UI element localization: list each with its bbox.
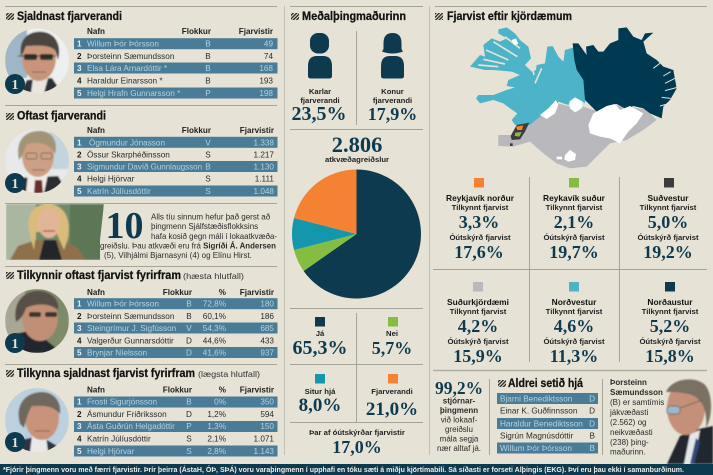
table: tilkynna sjaldnast: 1.143 (254, 447, 274, 456)
table: tilkynnir oftast: % (219, 288, 226, 297)
table: sjaldnast fjarverandi: 49 (264, 40, 273, 49)
district: Reykjavík norður: 17,6% (454, 242, 504, 262)
panel: aldrei setið hjá (497, 378, 598, 454)
district: Reykjavík suður: 2,1% (554, 212, 594, 232)
table: tilkynnir oftast: 937 (260, 348, 274, 358)
icon: kona (381, 33, 404, 78)
list: aldrei setið hjá: Willum Þór Þórsson (500, 444, 572, 453)
heading: Tilkynna sjaldnast fjarvist fyrirfram: (lægsta hlutfall) (198, 369, 260, 379)
heading: Tilkynna sjaldnast fjarvist fyrirfram: Tilkynna sjaldnast fjarvist fyrirfram (17, 368, 195, 380)
panel: tilkynnir oftast fjarvist fyrirfram (5, 270, 278, 358)
text block: Þorsteinn Sæmundsson: (B) er samtímis (610, 398, 664, 407)
table: tilkynnir oftast: 685 (260, 324, 274, 333)
district: Norðaustur: 5,2% (650, 316, 690, 336)
table: tilkynnir oftast: B (186, 300, 192, 309)
table: tilkynnir oftast: 54,3% (203, 324, 226, 333)
district: Reykjavík norður: Tilkynnt fjarvist (452, 203, 509, 212)
table: tilkynna sjaldnast: Ásta Guðrún Helgadóttir (87, 421, 175, 431)
callout: 99,2% stjórnarþingmenn: stjórnar- (443, 396, 476, 406)
table: tilkynnir oftast: 433 (260, 336, 274, 346)
table: sjaldnast fjarverandi: Þorsteinn Sæmundsson (87, 52, 175, 61)
list: aldrei setið hjá: B (590, 444, 596, 453)
table: tilkynna sjaldnast: 1.071 (254, 434, 274, 444)
table: tilkynnir oftast: Fjarvistir (240, 288, 275, 297)
table: tilkynnir oftast: 44,6% (203, 336, 226, 346)
district: Norðvestur: 11,3% (550, 346, 598, 366)
district: Norðaustur: Norðaustur (647, 297, 693, 307)
district: Reykjavík norður: Reykjavík norður (446, 193, 515, 203)
table: oftast fjarverandi: Össur Skarphéðinsson (87, 150, 170, 160)
text block: Þorsteinn Sæmundsson: maðurinn. (610, 448, 646, 456)
table: tilkynna sjaldnast: Flokkur (163, 386, 193, 394)
district: Suðurkjördæmi: Suðurkjördæmi (447, 297, 509, 307)
photo: Þorsteinn Sæmundsson (666, 379, 713, 464)
panel: meðalþingmaðurinn (291, 11, 421, 457)
table: sjaldnast fjarverandi: B (205, 64, 211, 73)
table: tilkynna sjaldnast (74, 386, 278, 456)
text block: atkvæði gegn máli: þingmenn Sjálfstæðisflokksins (151, 222, 258, 231)
table: tilkynnir oftast (74, 288, 278, 358)
stat: óútskýrðar fjarvistir: Þar af óútskýrðar fjarvistir (309, 428, 405, 437)
table: oftast fjarverandi: Fjarvistir (240, 126, 275, 135)
stat: konur fjarverandi (368, 87, 417, 124)
text block: Þorsteinn Sæmundsson: neikvæðasti (610, 428, 653, 437)
stat: konur fjarverandi: Konur (381, 87, 404, 96)
district: Reykjavík suður (543, 178, 606, 262)
photo: Frosti Sigurjónsson (5, 388, 69, 452)
text block: atkvæði gegn máli: (5), Vilhjálmi Bjarnasyni (4) og Elínu Hirst. (104, 251, 252, 260)
district: Suðvestur: Óútskýrð fjarvist (637, 233, 699, 242)
badge: 1 (5, 173, 25, 193)
stat: 2.806 atkvæðagreiðslur: 2.806 (332, 132, 382, 157)
stat: óútskýrðar fjarvistir: 17,0% (332, 437, 382, 457)
district: Suðurkjördæmi: Tilkynnt fjarvist (450, 307, 507, 316)
list: aldrei setið hjá: Haraldur Benediktsson (500, 420, 583, 428)
district: Norðaustur (639, 282, 701, 366)
district: Reykjavík suður: 19,7% (549, 242, 599, 262)
stat: karlar fjarverandi: fjarverandi (300, 96, 340, 105)
table: oftast fjarverandi: Sigmundur Davíð Gunnlaugsson (87, 161, 202, 171)
table: tilkynna sjaldnast: 5 (77, 447, 82, 456)
table: tilkynna sjaldnast: Katrín Júlíusdóttir (87, 434, 151, 444)
badge: 1: 1 (12, 337, 18, 352)
table: sjaldnast fjarverandi (74, 27, 278, 98)
table: tilkynnir oftast: 1 (77, 300, 82, 309)
badge: 1 (5, 432, 25, 452)
table: oftast fjarverandi: 1.217 (254, 151, 274, 160)
table: tilkynna sjaldnast: S (186, 447, 192, 456)
table: tilkynnir oftast: 5 (77, 348, 82, 358)
heading: Oftast fjarverandi: Oftast fjarverandi (17, 110, 106, 122)
stat: konur fjarverandi: fjarverandi (373, 96, 412, 105)
callout: 99,2% stjórnarþingmenn: mála segja (440, 434, 479, 444)
legend: fjarverandi: Fjarverandi (371, 387, 413, 396)
heading: Tilkynnir oftast fjarvist fyrirfram: Tilkynnir oftast fjarvist fyrirfram (17, 270, 181, 282)
list: aldrei setið hjá: D (589, 406, 595, 416)
district: Norðvestur: Óútskýrð fjarvist (543, 337, 605, 346)
table: tilkynnir oftast: Flokkur (163, 288, 193, 297)
district: Norðvestur (543, 282, 605, 366)
badge: 1: 1 (12, 78, 18, 93)
table: sjaldnast fjarverandi: 198 (259, 89, 273, 98)
district: Norðaustur: Óútskýrð fjarvist (639, 337, 701, 346)
big number 10: 10 (106, 205, 144, 247)
table: sjaldnast fjarverandi: 168 (259, 64, 273, 73)
district: Norðvestur: Tilkynnt fjarvist (546, 307, 603, 316)
table: oftast fjarverandi: 2 (77, 151, 82, 160)
table: tilkynnir oftast: B (186, 312, 192, 321)
text block: atkvæði gegn máli: hafa kosið gegn máli í lokaatkvæða- (151, 232, 277, 241)
table: tilkynnir oftast: 41,6% (203, 348, 226, 358)
table: tilkynna sjaldnast: 350 (260, 398, 274, 407)
callout: 99,2% stjórnarþingmenn: nær alltaf já. (437, 444, 481, 453)
text block: Þorsteinn Sæmundsson (609, 378, 664, 456)
table: sjaldnast fjarverandi: 193 (259, 76, 273, 86)
table: tilkynnir oftast: 186 (260, 312, 274, 321)
list: aldrei setið hjá (497, 393, 598, 454)
table: tilkynna sjaldnast: 2,8% (207, 447, 226, 456)
district: Reykjavík suður: Reykavík suður (543, 193, 606, 203)
panel: tilkynna sjaldnast fjarvist fyrirfram (5, 368, 278, 456)
table: oftast fjarverandi: 4 (77, 175, 82, 184)
table: sjaldnast fjarverandi: Elsa Lára Arnardóttir * (87, 64, 168, 73)
table: tilkynna sjaldnast: 2,1% (207, 434, 226, 444)
table: tilkynna sjaldnast: 150 (260, 422, 274, 431)
table: oftast fjarverandi: Flokkur (182, 126, 212, 135)
table: oftast fjarverandi: V (205, 138, 211, 147)
table: tilkynnir oftast: Steingrímur J. Sigfússon (87, 324, 177, 333)
table: oftast fjarverandi: 1.048 (254, 187, 274, 196)
table: sjaldnast fjarverandi: 1 (77, 40, 82, 49)
table: sjaldnast fjarverandi: 5 (77, 89, 82, 98)
badge: 1 (5, 333, 25, 353)
table: tilkynna sjaldnast: 1,2% (207, 410, 226, 419)
table: oftast fjarverandi: 1 (77, 138, 82, 147)
table: oftast fjarverandi: 3 (77, 162, 82, 171)
table: tilkynnir oftast: D (186, 336, 192, 346)
table: tilkynnir oftast: 4 (77, 336, 82, 346)
table: tilkynna sjaldnast: Helgi Hjörvar (87, 447, 135, 456)
text block: Þorsteinn Sæmundsson: (238) þing- (610, 438, 649, 447)
table: sjaldnast fjarverandi: 74 (264, 52, 273, 61)
table: tilkynnir oftast: D (186, 348, 192, 358)
district: Suðurkjördæmi: 4,2% (458, 316, 498, 336)
pie chart (292, 170, 421, 299)
table: oftast fjarverandi: 1.338 (254, 138, 274, 147)
legend: situr hjá: Situr hjá (305, 387, 336, 396)
list: aldrei setið hjá: Bjarni Benediktsson (500, 394, 573, 404)
panel: tíu atkvæði gegn máli (6, 204, 277, 260)
text block: atkvæði gegn máli: greiðslu. Þau atkvæði eru frá Sigríði Á. Andersen (100, 241, 276, 250)
table: tilkynnir oftast: V (186, 324, 192, 333)
table: oftast fjarverandi: 1.130 (254, 162, 274, 171)
stat: 2.806 atkvæðagreiðslur (325, 132, 389, 164)
table: tilkynnir oftast: Willum Þór Þórsson (87, 300, 159, 309)
callout: 99,2% stjórnarþingmenn: greiðslu (445, 425, 473, 434)
table: tilkynna sjaldnast: B (186, 398, 192, 407)
callout: 99,2% stjórnarþingmenn (435, 378, 483, 453)
legend: situr hjá: 8,0% (299, 395, 341, 416)
table: tilkynna sjaldnast: 0% (214, 398, 226, 407)
stat: konur fjarverandi: 17,9% (368, 104, 417, 124)
photo: Willum Þór Þórsson (5, 289, 69, 353)
table: tilkynna sjaldnast: Fjarvistir (240, 386, 275, 394)
table: tilkynna sjaldnast: S (186, 434, 192, 444)
text block: Þorsteinn Sæmundsson: jákvæðasti (609, 408, 648, 417)
district: Reykjavík norður: 3,3% (459, 212, 499, 232)
table: tilkynna sjaldnast: Frosti Sigurjónsson (87, 398, 158, 407)
table: sjaldnast fjarverandi: B (205, 76, 211, 86)
text block: Þorsteinn Sæmundsson: (2.562) og (610, 418, 646, 427)
map: Ísland eftir kjördæmum (470, 27, 677, 168)
icon: karl (308, 33, 332, 78)
table: tilkynna sjaldnast: 1,3% (207, 422, 226, 431)
table: oftast fjarverandi: Helgi Hjörvar (87, 175, 135, 184)
panel: sjaldnast fjarverandi (5, 11, 278, 98)
list: aldrei setið hjá: Sigrún Magnúsdóttir (500, 432, 574, 440)
table: sjaldnast fjarverandi: P (205, 89, 211, 98)
table: sjaldnast fjarverandi: 3 (77, 64, 82, 73)
heading: Sjaldnast fjarverandi: Sjaldnast fjarverandi (17, 11, 122, 23)
table: tilkynnir oftast: Þorsteinn Sæmundsson (87, 312, 175, 321)
table: oftast fjarverandi: S (205, 151, 211, 160)
legend: situr hjá (299, 374, 341, 416)
district: Reykjavík suður: Tilkynnt fjarvist (546, 203, 603, 212)
table: oftast fjarverandi: Katrín Júlíusdóttir (87, 187, 151, 196)
table: tilkynna sjaldnast: P (186, 422, 192, 431)
table: tilkynnir oftast: 2 (77, 312, 82, 321)
table: tilkynna sjaldnast: 594 (260, 410, 274, 419)
stat: óútskýrðar fjarvistir (309, 428, 405, 457)
table: tilkynna sjaldnast: 2 (77, 410, 82, 419)
table: tilkynna sjaldnast: 4 (77, 434, 82, 444)
table: sjaldnast fjarverandi: 2 (77, 52, 82, 61)
district: Norðvestur: Norðvestur (552, 297, 597, 307)
stat: karlar fjarverandi: 23,5% (292, 103, 346, 125)
list: aldrei setið hjá: Einar K. Guðfinnsson (500, 406, 578, 416)
stat: karlar fjarverandi (292, 87, 346, 125)
table: oftast fjarverandi (74, 126, 278, 196)
badge: 1 (5, 74, 25, 94)
district: Suðurkjördæmi: 15,9% (453, 346, 503, 366)
table: tilkynna sjaldnast: 1 (77, 398, 82, 407)
table: sjaldnast fjarverandi: Nafn (87, 27, 105, 36)
table: sjaldnast fjarverandi: B (205, 52, 211, 61)
district: Suðurkjördæmi (447, 282, 509, 366)
district: Suðurkjördæmi: Óútskýrð fjarvist (447, 337, 509, 346)
table: sjaldnast fjarverandi: Helgi Hrafn Gunnarsson * (87, 89, 181, 98)
heading: Meðalþingmaðurinn: Meðalþingmaðurinn (302, 11, 406, 23)
district: Reykjavík norður: Óútskýrð fjarvist (449, 233, 511, 242)
text block: atkvæði gegn máli: Alls tíu sinnum hefur það gerst að (151, 212, 271, 222)
legend: fjarverandi (366, 374, 418, 420)
legend: já (292, 317, 348, 359)
badge: 1: 1 (12, 177, 18, 192)
text block: Þorsteinn Sæmundsson: Sæmundsson (610, 388, 663, 397)
panel: oftast fjarverandi (5, 110, 278, 196)
panel: fjarvist eftir kjördæmum (435, 11, 701, 366)
callout: 99,2% stjórnarþingmenn: við lokaaf- (441, 416, 478, 424)
text block: Þorsteinn Sæmundsson: Þorsteinn (610, 378, 647, 387)
photo: Sigríður Á. Andersen (6, 204, 104, 260)
legend: fjarverandi: 21,0% (366, 399, 418, 420)
text block: atkvæði gegn máli (100, 212, 277, 260)
district: Norðaustur: Tilkynnt fjarvist (642, 307, 699, 316)
district: Suðvestur (637, 178, 699, 262)
district: Suðvestur: Suðvestur (648, 193, 689, 203)
district: Norðvestur: 4,6% (554, 316, 594, 336)
list: aldrei setið hjá: B (590, 432, 596, 440)
list: aldrei setið hjá: D (589, 420, 595, 428)
table: tilkynnir oftast: Valgerður Gunnarsdóttir (87, 336, 174, 346)
badge: 1: 1 (12, 436, 18, 451)
table: tilkynna sjaldnast: D (186, 410, 192, 419)
heading: Tilkynnir oftast fjarvist fyrirfram: (hæsta hlutfall) (183, 271, 244, 281)
district: Suðvestur: 5,0% (648, 212, 688, 232)
table: sjaldnast fjarverandi: Flokkur (182, 27, 212, 36)
table: oftast fjarverandi: S (205, 187, 211, 196)
list: aldrei setið hjá: D (589, 394, 595, 404)
legend: já: 65,3% (292, 337, 348, 359)
table: tilkynnir oftast: 60,1% (203, 312, 226, 321)
callout: 99,2% stjórnarþingmenn: 99,2% (435, 378, 483, 398)
table: oftast fjarverandi: 1.111 (255, 175, 274, 184)
district: Suðvestur: 19,2% (643, 242, 693, 262)
table: tilkynnir oftast: Brynjar Níelsson (87, 348, 148, 358)
stat: karlar fjarverandi: Karlar (309, 87, 331, 96)
photo: Willum Þór Þórsson (5, 28, 69, 94)
district: Suðvestur: Tilkynnt fjarvist (640, 203, 697, 212)
table: sjaldnast fjarverandi: Willum Þór Þórsson (87, 40, 159, 49)
legend: nei (372, 317, 412, 358)
heading: Fjarvist eftir kjördæmum: Fjarvist eftir kjördæmum (447, 11, 572, 23)
table: tilkynnir oftast: 180 (260, 300, 274, 309)
district: Reykjavík suður: Óútskýrð fjarvist (543, 233, 605, 242)
stat: 2.806 atkvæðagreiðslur: atkvæðagreiðslur (325, 155, 389, 164)
legend: já: Já (316, 329, 325, 338)
table: tilkynna sjaldnast: 3 (77, 422, 82, 431)
table: tilkynna sjaldnast: Ásmundur Friðriksson (87, 409, 167, 419)
table: oftast fjarverandi: Ögmundur Jónasson (89, 137, 165, 147)
table: oftast fjarverandi: Nafn (87, 126, 105, 135)
table: tilkynna sjaldnast: % (219, 386, 226, 394)
heading: Aldrei setið hjá: Aldrei setið hjá (508, 378, 584, 390)
table: sjaldnast fjarverandi: B (205, 40, 211, 49)
table: tilkynnir oftast: 3 (77, 324, 82, 333)
legend: nei: Nei (386, 329, 398, 338)
district: Norðaustur: 15,8% (645, 346, 695, 366)
table: tilkynna sjaldnast: Nafn (87, 386, 105, 394)
table: sjaldnast fjarverandi: 4 (77, 76, 82, 86)
table: oftast fjarverandi: 5 (77, 187, 82, 196)
district: Reykjavík norður (446, 178, 515, 262)
table: tilkynnir oftast: 72,8% (203, 300, 226, 309)
table: oftast fjarverandi: B (205, 162, 211, 171)
callout: 99,2% stjórnarþingmenn: þingmenn (440, 406, 478, 415)
table: oftast fjarverandi: S (205, 175, 211, 184)
legend: nei: 5,7% (372, 338, 412, 358)
table: sjaldnast fjarverandi: Haraldur Einarsson * (87, 76, 163, 86)
table: sjaldnast fjarverandi: Fjarvistir (239, 27, 274, 36)
table: tilkynnir oftast: Nafn (87, 288, 105, 297)
photo: Ögmundur Jónasson (5, 129, 70, 193)
